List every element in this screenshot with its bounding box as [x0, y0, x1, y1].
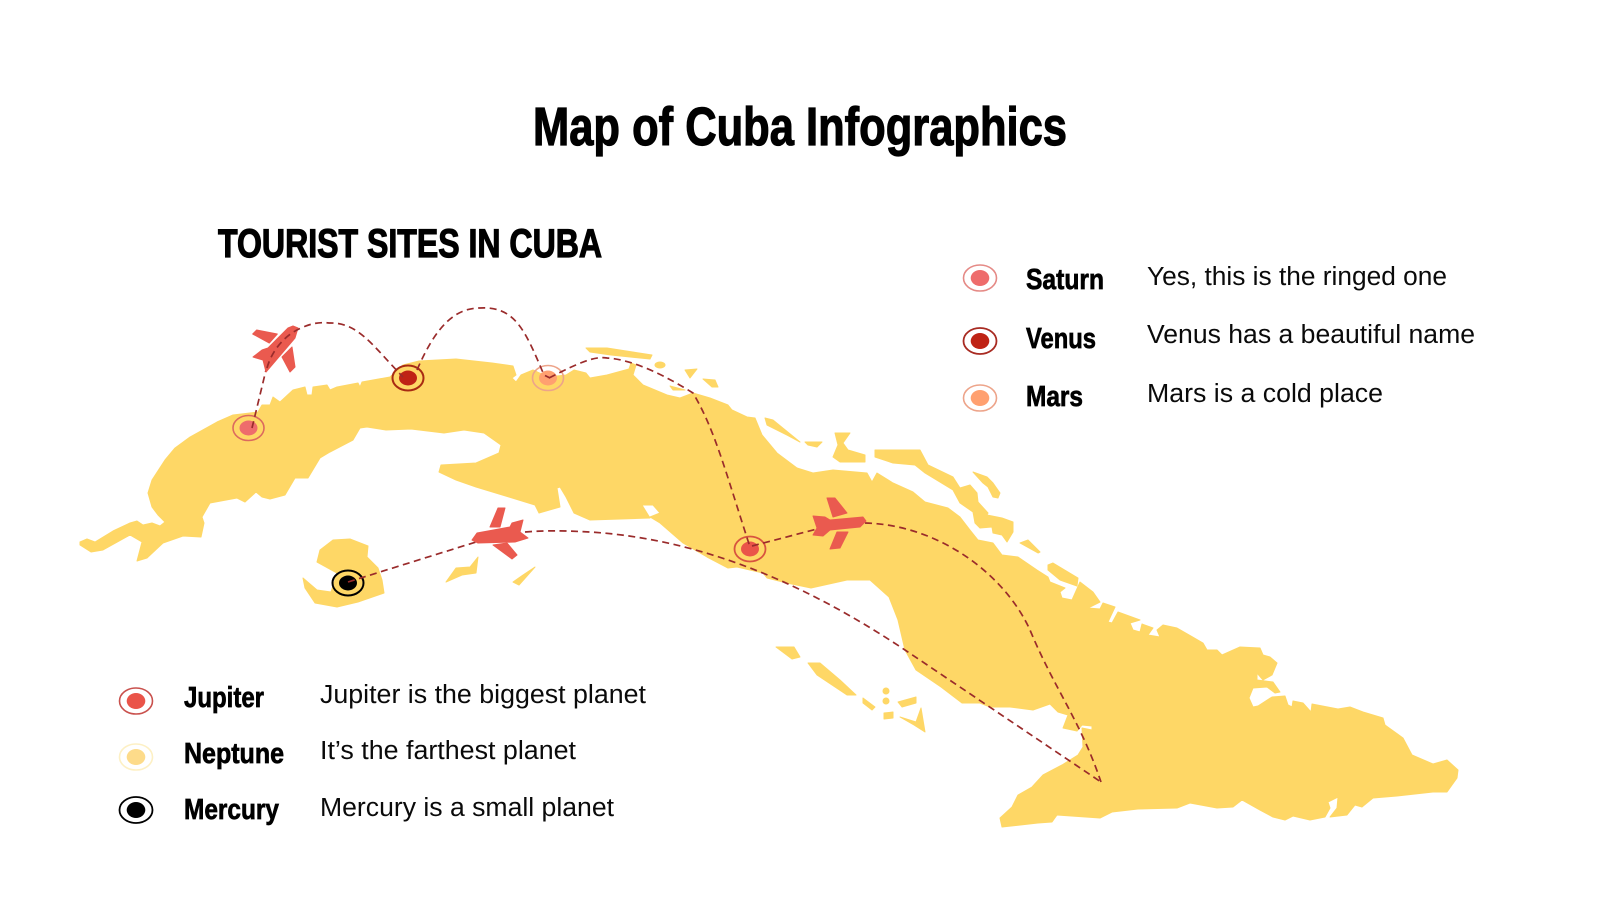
- Isle of Youth: [303, 539, 384, 607]
- route: Saturn to Venus: [252, 370, 266, 428]
- marker: Mars: [532, 366, 564, 390]
- title: Map of Cuba Infographics: [533, 97, 1067, 157]
- marker: Venus: [392, 366, 424, 390]
- flight routes: [252, 308, 1101, 782]
- legend item: Jupiter: [120, 681, 646, 714]
- legend item: Saturn: Yes, this is the ringed one: [1147, 263, 1447, 291]
- route: Jupiter to east: [752, 523, 1101, 782]
- legend: left: [120, 681, 646, 826]
- plane: north-west: [253, 326, 298, 372]
- legend item: Mercury: [120, 794, 614, 826]
- main island: [80, 359, 1458, 827]
- cays: [446, 557, 478, 582]
- legend item: Mars: [964, 380, 1383, 413]
- legend item: Saturn: Saturn: [1026, 264, 1104, 296]
- legend item: Mercury: Mercury: [184, 794, 279, 826]
- legend: right: [964, 263, 1475, 413]
- legend item: Neptune: Neptune: [184, 738, 284, 770]
- legend item: Mars: Mars: [1026, 381, 1083, 413]
- marker: Mercury: [332, 570, 364, 596]
- plane: centre: [813, 498, 866, 549]
- marker: Saturn: [233, 416, 264, 440]
- legend item: Jupiter: Jupiter: [184, 682, 264, 714]
- route: Venus to Mars: [417, 308, 550, 378]
- legend item: Mercury: Mercury is a small planet: [320, 794, 614, 822]
- subtitle: tourist sites: TOURIST SITES IN CUBA: [218, 222, 602, 266]
- legend item: Neptune: [120, 737, 576, 770]
- legend item: Venus: Venus has a beautiful name: [1147, 321, 1475, 349]
- marker: Jupiter: [734, 536, 766, 562]
- route: Mercury to east: [348, 531, 1101, 782]
- legend item: Jupiter: Jupiter is the biggest planet: [320, 681, 646, 709]
- legend item: Mars: Mars is a cold place: [1147, 380, 1383, 408]
- legend item: Venus: Venus: [1026, 323, 1096, 355]
- plane: south-west: [472, 508, 528, 559]
- legend item: Saturn: [964, 263, 1447, 296]
- legend item: Neptune: It’s the farthest planet: [320, 737, 576, 765]
- map markers: [233, 366, 766, 596]
- map of Cuba: [80, 348, 1458, 827]
- route: over north-west plane: [267, 323, 403, 377]
- legend item: Venus: [964, 321, 1475, 355]
- route: Mars to Jupiter: [549, 358, 750, 547]
